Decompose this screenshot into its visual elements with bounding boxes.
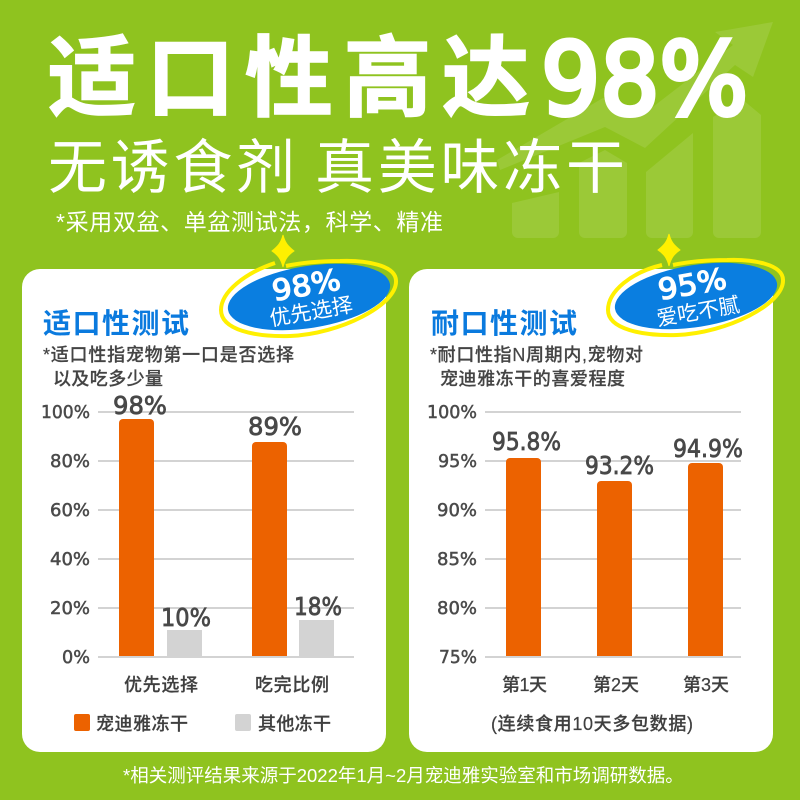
bar chart: palatability: 40% — [50, 549, 90, 570]
legend: 其他冻干 — [258, 714, 331, 734]
bar chart: durability — [427, 402, 743, 695]
bar chart: durability: 80% — [437, 598, 477, 619]
badge: 95%: 95% — [655, 261, 729, 307]
title: 98% — [541, 21, 748, 138]
badge: 95% — [608, 234, 783, 339]
bar chart: palatability: 89% — [248, 412, 302, 441]
bar chart: durability: 93.2% — [585, 451, 654, 480]
bar chart: durability: 第3天 — [683, 675, 729, 695]
panel: palatability test — [22, 269, 386, 752]
bar chart: palatability: 优先选择 — [124, 675, 198, 695]
panel note: *耐口性指N周期内,宠物对 — [430, 345, 643, 365]
bar chart: palatability: 98% — [113, 391, 167, 420]
bar chart: durability: 100% — [427, 402, 477, 423]
bar chart: palatability: 吃完比例 — [255, 675, 329, 695]
badge: 98% — [221, 235, 396, 340]
bar chart: palatability — [41, 391, 354, 695]
panel heading: 适口性测试 — [43, 308, 189, 339]
bar chart: durability: 第1天 — [502, 675, 547, 695]
data caption: (连续食用10天多包数据) — [491, 714, 693, 734]
subtitle — [48, 135, 625, 201]
panel note — [430, 345, 643, 389]
bar chart: durability: 95.8% — [492, 427, 561, 456]
legend: 宠迪雅冻干 — [96, 714, 188, 734]
badge: 98%: 优先选择 — [268, 294, 355, 331]
subtitle: 无诱食剂 — [48, 135, 295, 201]
badge: 98%: 98% — [269, 262, 343, 308]
bar chart: palatability: 20% — [50, 598, 90, 619]
bar chart: durability: 第2天 — [593, 675, 639, 695]
badge: 95%: 爱吃不腻 — [655, 294, 742, 331]
panel heading: 耐口性测试 — [431, 308, 577, 339]
bar chart: durability: 85% — [437, 549, 477, 570]
panel note — [43, 345, 294, 389]
subtitle: 真美味冻干 — [315, 135, 625, 201]
panel note: 以及吃多少量 — [53, 369, 163, 389]
bar chart: durability: 90% — [437, 500, 477, 521]
panel note: *适口性指宠物第一口是否选择 — [43, 345, 294, 365]
test method note: *采用双盆、单盆测试法，科学、精准 — [56, 209, 443, 235]
title: 适口性高达 — [48, 29, 530, 128]
footnote: *相关测评结果来源于2022年1月~2月宠迪雅实验室和市场调研数据。 — [123, 765, 684, 786]
bar chart: palatability: 18% — [294, 592, 342, 621]
bar chart: durability: 94.9% — [673, 434, 743, 463]
panel note: 宠迪雅冻干的喜爱程度 — [440, 369, 625, 389]
decorative rising bars and arrow — [497, 22, 773, 238]
title — [48, 21, 748, 138]
legend — [74, 714, 331, 734]
bar chart: palatability: 60% — [50, 500, 90, 521]
bar chart: durability: 75% — [439, 647, 477, 668]
bar chart: palatability: 80% — [50, 451, 90, 472]
bar chart: palatability: 0% — [62, 647, 90, 668]
bar chart: palatability: 10% — [161, 603, 211, 632]
bar chart: durability: 95% — [438, 451, 477, 472]
bar chart: palatability: 100% — [41, 402, 90, 423]
panel: durability test — [409, 269, 773, 752]
